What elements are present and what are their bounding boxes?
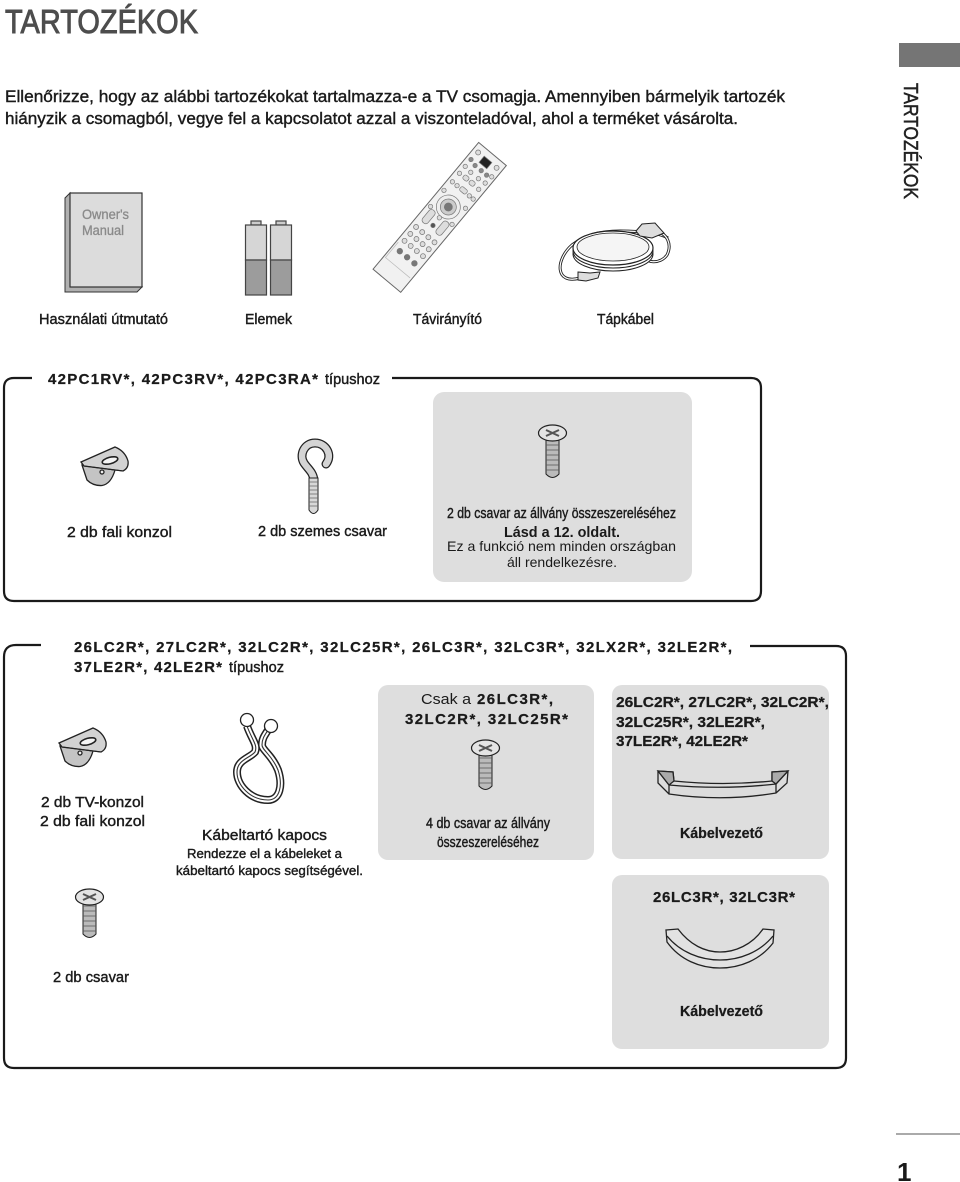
heading: 42PC models: 42PC1RV*, 42PC3RV*, 42PC3RA* [48,371,318,388]
gray box: 4 screws [378,685,594,860]
heading: 26LC-42LE models: típushoz [229,660,284,676]
intro text: hiányzik a csomagból, vegye fel a kapcsolatot azzal a viszonteladóval, ahol a terméket vásárolta. [5,109,738,128]
gray box text: Lásd a 12. oldalt. [504,525,620,541]
label: 4 screws: 4 db csavar az állvány [426,816,551,832]
panel: 26LC-42LE models [4,639,846,1068]
icon: owner's manual: Owner's [82,207,129,222]
gray box text [447,506,676,570]
icon: owner's manual: Manual [82,223,124,238]
panel: 42PC models [4,371,761,601]
gray box heading: guide models: 32LC25R*, 32LE2R*, [616,714,765,731]
icon: owner's manual [65,193,142,292]
label: brackets [40,795,145,830]
gray box heading: screws: Csak a [421,691,472,708]
label: cable clip: kábeltartó kapocs segítségével. [176,863,363,878]
heading: 26LC-42LE models: 26LC2R*, 27LC2R*, 32LC2R*, 32LC25R*, 26LC3R*, 32LC3R*, 32LX2R*, 32LE2R*, [74,639,732,656]
icon: stand screw [538,425,566,478]
icon: wall bracket [81,447,128,486]
accessory labels: Távirányító [413,312,482,328]
intro text: Ellenőrizze, hogy az alábbi tartozékokat tartalmazza-e a TV csomagja. Amennyiben bármelyik tartozék [5,87,785,106]
label: small screw: 2 db csavar [53,970,129,986]
intro text [5,87,785,128]
icon: TV bracket [59,728,106,767]
icon: angular cable guide [658,771,788,798]
label: eye screw: 2 db szemes csavar [258,524,387,540]
icon: cable clip [237,714,280,800]
label: cable clip: Kábeltartó kapocs [202,828,327,844]
label: cable clip [176,828,363,878]
icon: batteries [246,221,292,295]
gray box: guide for 26LC3R, 32LC3R [612,875,829,1049]
side tab label: TARTOZÉKOK [899,83,922,200]
gray box: guide for 26LC2R and others [612,685,829,859]
gray box text: Ez a funkció nem minden országban [447,538,676,554]
accessory labels [39,312,654,328]
gray box text: áll rendelkezésre. [507,554,617,570]
icon: curved cable guide [666,929,774,968]
gray box: stand screws [433,392,692,582]
icon: eye screw [302,443,329,514]
accessory labels: Elemek [245,312,293,328]
label: cable guide: Kábelvezető [680,826,763,842]
label: brackets: 2 db fali konzol [40,814,145,830]
icon: remote control [373,142,506,292]
label: cable clip: Rendezze el a kábeleket a [187,846,343,861]
side tab marker [899,43,960,67]
icon: stand screw small panel [472,740,500,790]
label: 4 screws: összeszereléséhez [437,835,539,851]
page number [896,1134,960,1182]
accessory labels: Használati útmutató [39,312,168,328]
accessory labels: Tápkábel [597,312,654,328]
label: wall bracket: 2 db fali konzol [67,525,172,541]
gray box text: 2 db csavar az állvány összeszereléséhez [447,506,676,522]
title: TARTOZÉKOK [5,3,198,40]
icon: power cable [560,223,669,281]
gray box heading: guide models: 37LE2R*, 42LE2R* [616,733,748,750]
heading: 26LC-42LE models [74,639,732,676]
icon: small screw [76,889,104,938]
gray box heading: guide models: 26LC2R*, 27LC2R*, 32LC2R*, [616,694,829,711]
gray box heading: 26LC3R: 26LC3R*, 32LC3R* [653,889,795,906]
label: 4 screws [426,816,551,851]
label: brackets: 2 db TV-konzol [41,795,144,811]
gray box heading: screws: 32LC2R*, 32LC25R* [405,711,568,728]
gray box heading: screws [405,691,568,728]
heading: 26LC-42LE models: 37LE2R*, 42LE2R* [74,659,222,676]
gray box heading: guide models [616,694,829,750]
heading: 42PC models: típushoz [325,372,380,388]
gray box heading: screws: 26LC3R*, [477,691,553,708]
label: cable guide 2: Kábelvezető [680,1004,763,1020]
